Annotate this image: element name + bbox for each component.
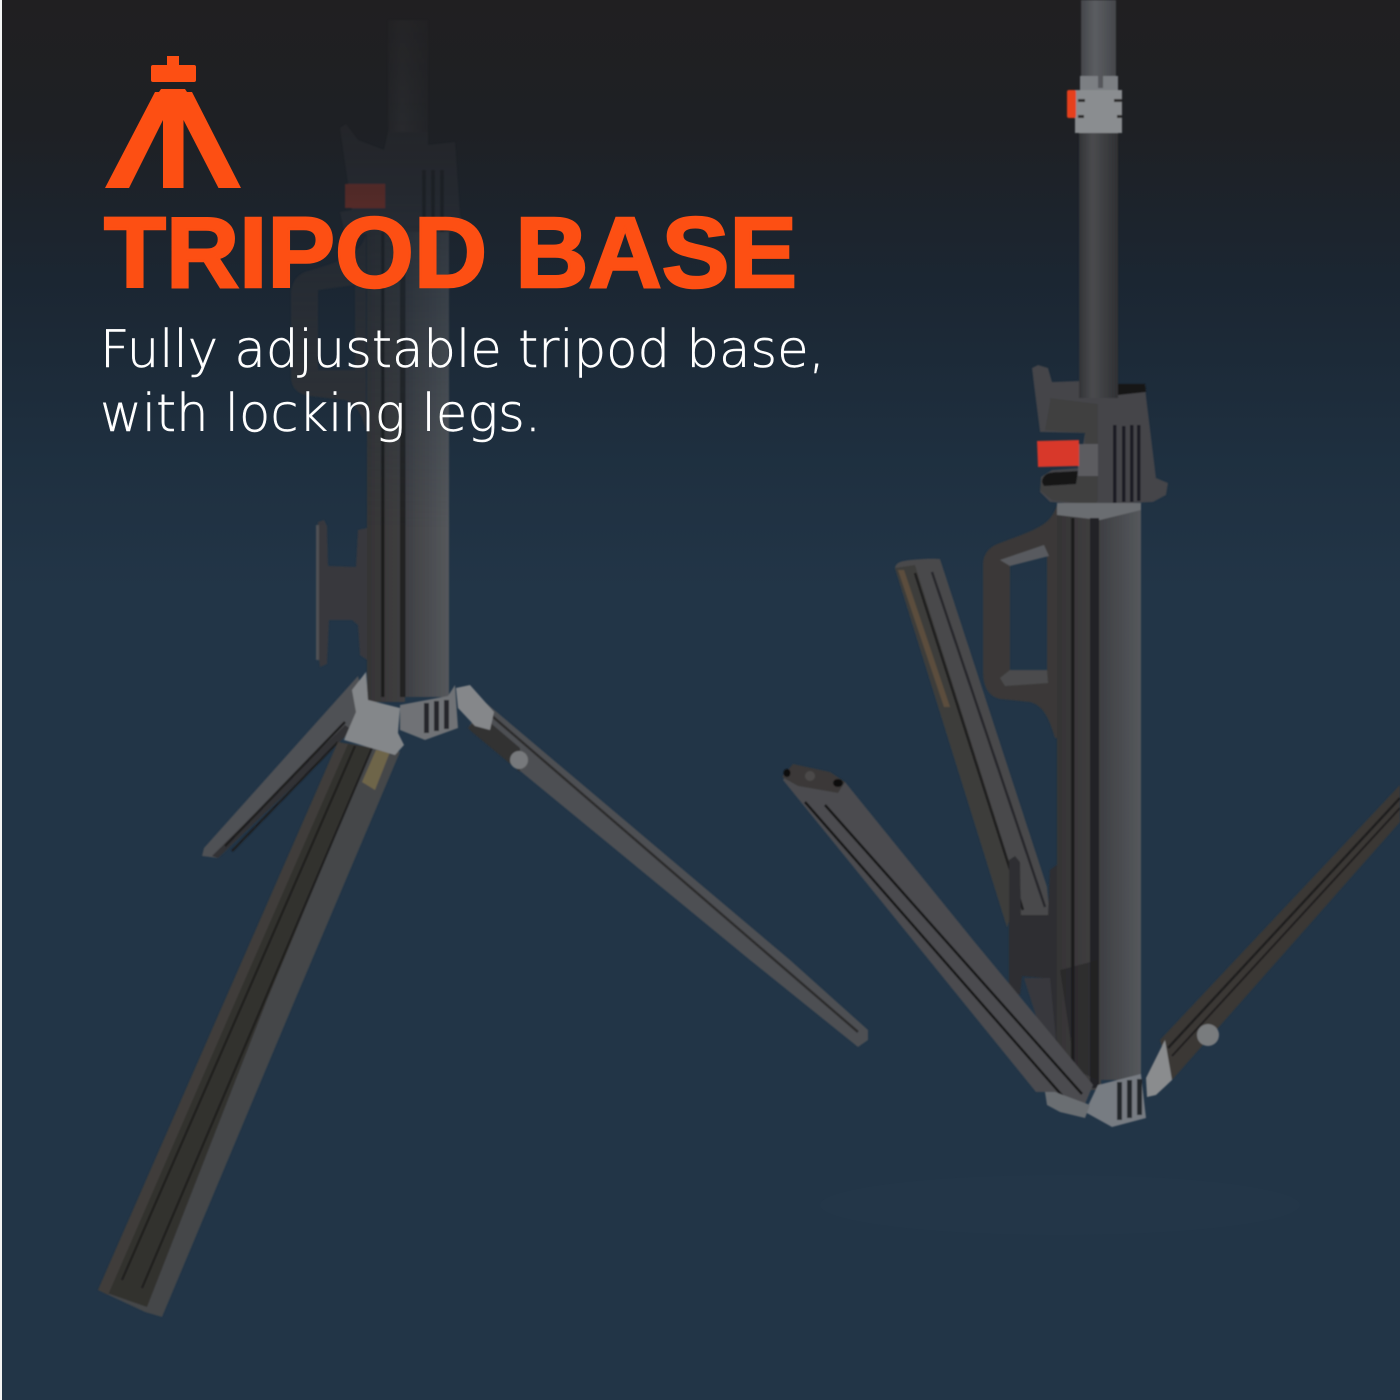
left tripod pole xyxy=(396,98,413,132)
left tripod right leg xyxy=(468,703,868,1047)
title: TRIPOD BASE xyxy=(104,197,797,309)
right leg xyxy=(1160,785,1400,1080)
left tripod column xyxy=(367,232,449,702)
left tripod hinge xyxy=(344,672,494,755)
carry handle xyxy=(983,505,1058,738)
mounting bracket xyxy=(1009,856,1060,1062)
main column xyxy=(1057,503,1141,1090)
left tripod handle xyxy=(291,235,366,432)
base cap xyxy=(1045,1040,1172,1127)
description text xyxy=(100,320,825,444)
description text: with locking legs. xyxy=(100,384,541,444)
folded front leg xyxy=(782,764,1093,1104)
floor shadow xyxy=(820,1175,1300,1235)
red locking clip xyxy=(1037,440,1079,467)
rear leg behind column xyxy=(895,559,1050,927)
left tripod rear leg xyxy=(202,676,366,858)
left tripod clamp head xyxy=(342,182,460,233)
left tripod mounting bracket xyxy=(316,520,367,667)
extending upper pole xyxy=(1079,0,1118,402)
pole collar with red clip xyxy=(1067,76,1122,133)
right tripod xyxy=(782,0,1400,1127)
icon: tripod xyxy=(105,56,241,188)
left tripod front leg xyxy=(98,742,400,1317)
clamp head xyxy=(1032,365,1168,505)
description text: Fully adjustable tripod base, xyxy=(100,320,825,380)
left tripod xyxy=(98,20,868,1317)
